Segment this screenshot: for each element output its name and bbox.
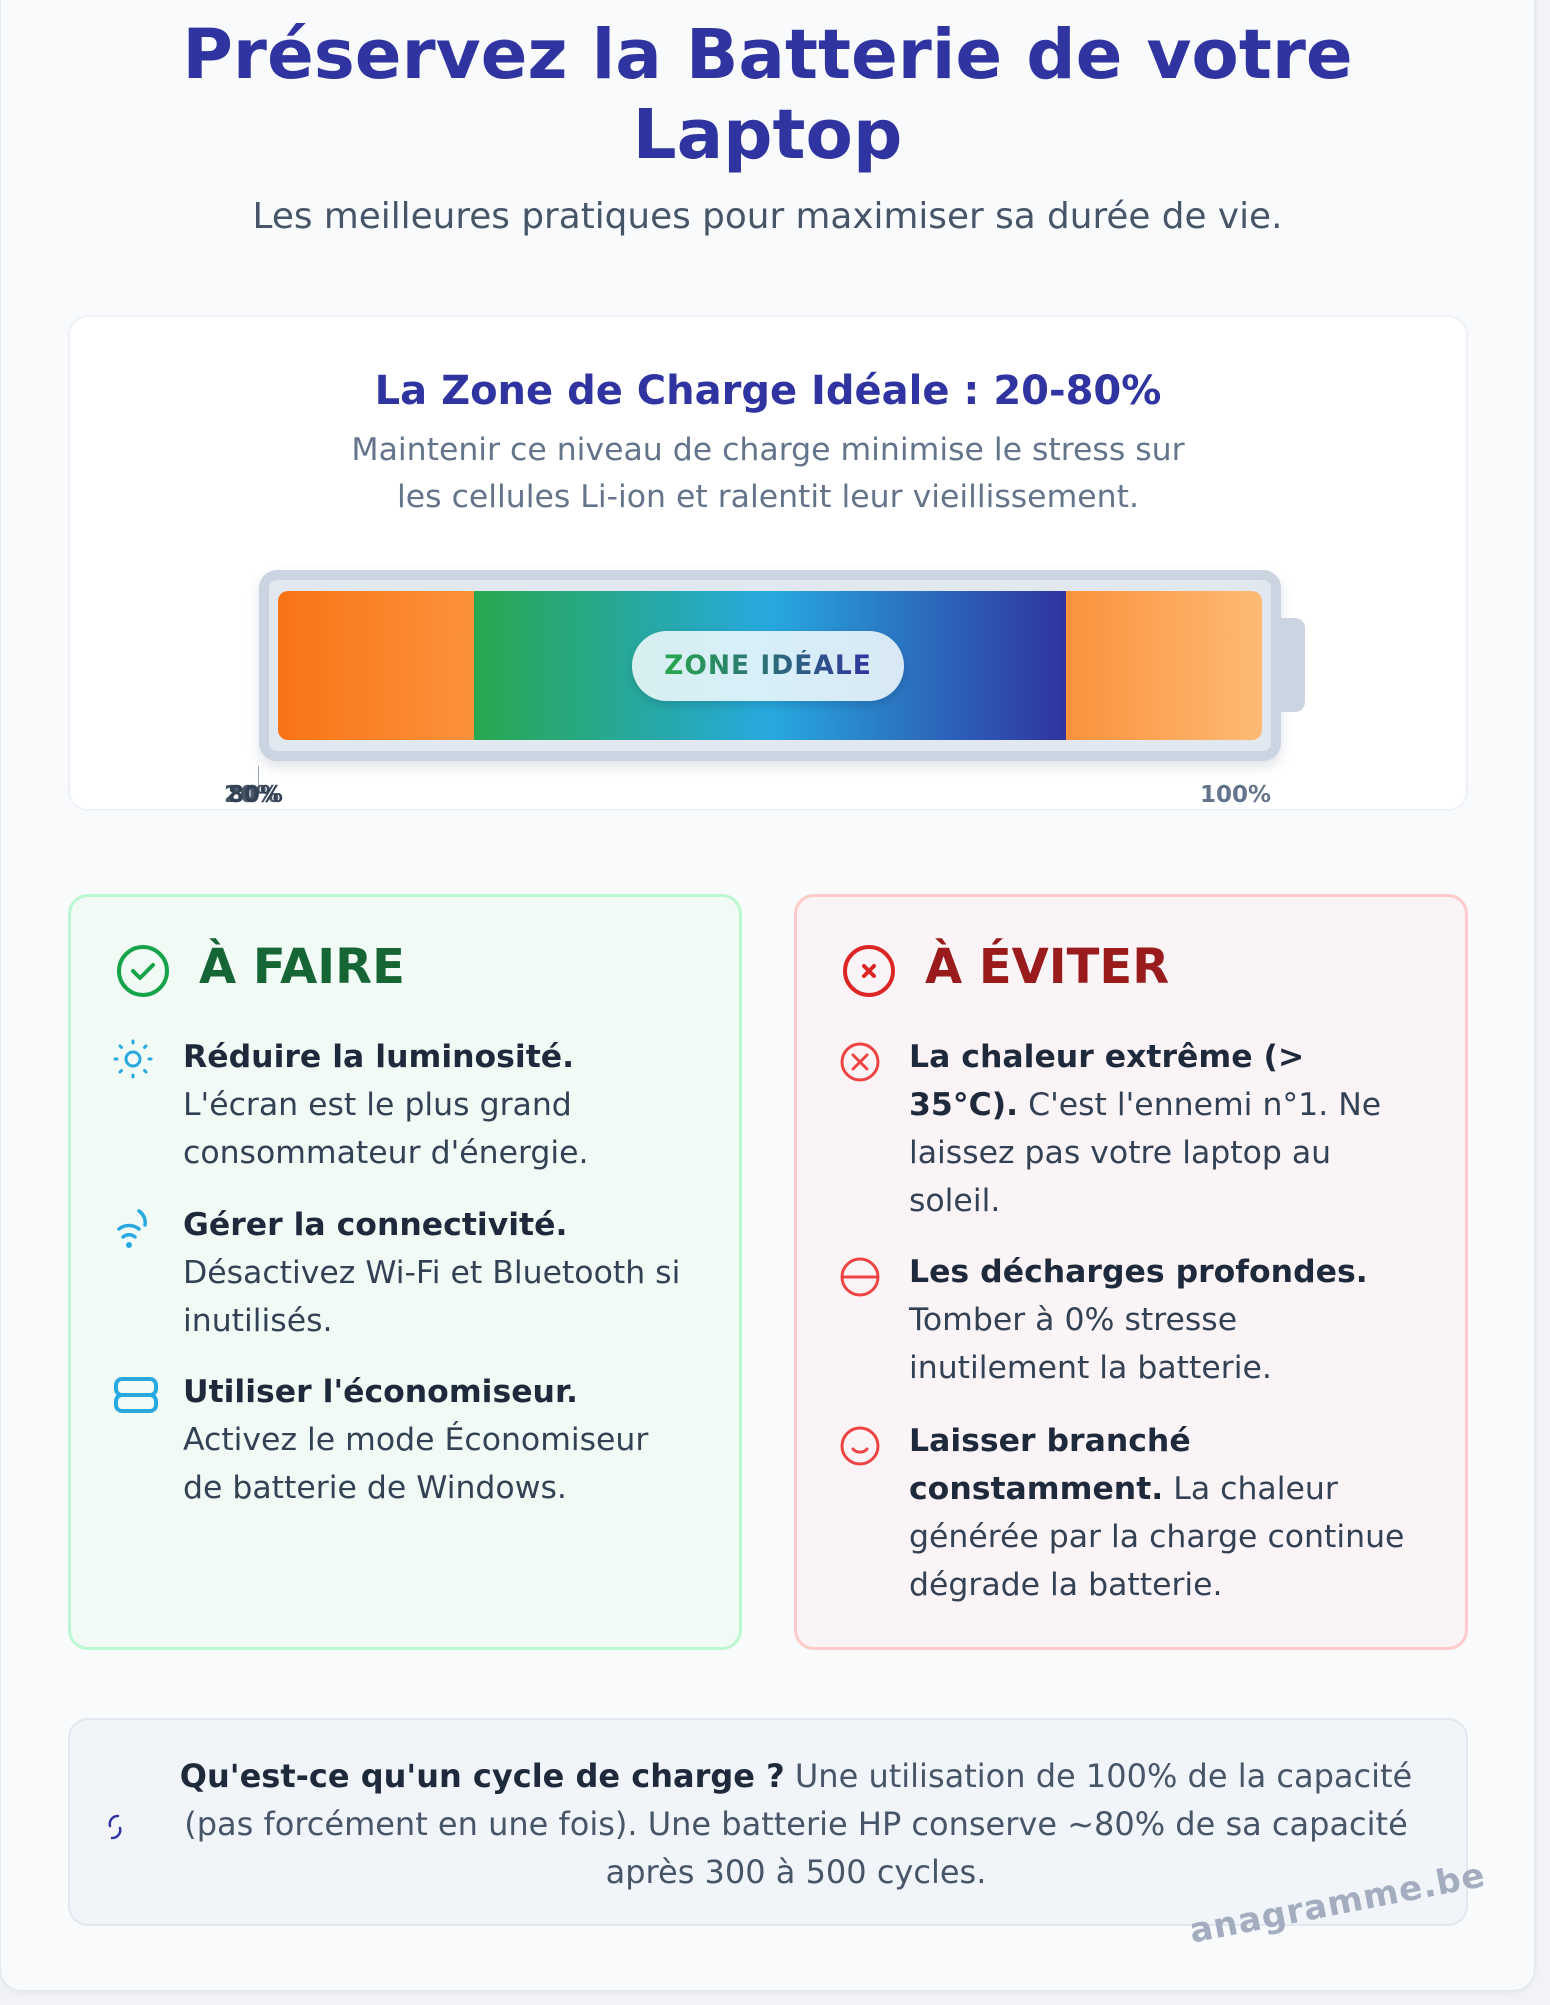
item: saver: Activez le mode Économiseur de batterie de Windows.	[183, 1422, 648, 1506]
panel: ideal charge zone	[68, 315, 1468, 811]
icon: x circle	[843, 945, 895, 997]
panel: do	[68, 894, 742, 1650]
pill label	[632, 631, 904, 701]
item: deep discharge: Tomber à 0% stresse inutilement la batterie.	[909, 1302, 1272, 1386]
item: brightness: Réduire la luminosité.	[183, 1039, 574, 1075]
zone description: les cellules Li-ion et ralentit leur vieillissement.	[397, 479, 1139, 515]
zone description	[351, 432, 1185, 515]
scale labels: 100%	[1200, 782, 1271, 808]
avoid heading: À ÉVITER	[925, 939, 1169, 995]
item: brightness: L'écran est le plus grand consommateur d'énergie.	[183, 1087, 588, 1171]
zone description: Maintenir ce niveau de charge minimise le stress sur	[351, 432, 1185, 468]
scale labels: 80%	[228, 782, 283, 808]
item: saver: Utiliser l'économiseur.	[183, 1374, 578, 1410]
title	[182, 15, 1353, 175]
info text: Qu'est-ce qu'un cycle de charge ? Une utilisation de 100% de la capacité (pas forcément en une fois). Une batterie HP conserve ~80% de sa capacité après 300 à 500 cycles.	[180, 1757, 1412, 1891]
title: Laptop	[633, 95, 902, 175]
subtitle: Les meilleures pratiques pour maximiser sa durée de vie.	[253, 196, 1282, 237]
icon: sun	[114, 1040, 152, 1078]
icon: plug circle	[840, 1426, 880, 1466]
panel: avoid	[794, 894, 1468, 1650]
icon: check circle	[117, 945, 169, 997]
info box: charge cycle	[68, 1718, 1468, 1926]
item: brightness	[114, 1039, 588, 1171]
watermark: anagramme.be	[1186, 1855, 1489, 1952]
item: connectivity	[117, 1207, 680, 1339]
item: connectivity: Désactivez Wi-Fi et Bluetooth si inutilisés.	[183, 1255, 680, 1339]
title: Préservez la Batterie de votre	[182, 15, 1353, 95]
icon: minus circle	[840, 1258, 880, 1296]
icon: wifi	[117, 1209, 147, 1248]
do heading	[117, 938, 405, 997]
icon: battery saver	[114, 1377, 158, 1413]
do heading: À FAIRE	[199, 939, 405, 995]
item: saver	[114, 1374, 648, 1506]
item: connectivity: Gérer la connectivité.	[183, 1207, 567, 1243]
battery graphic	[256, 570, 1305, 770]
icon: cycle	[108, 1814, 122, 1840]
pill label: ZONE IDÉALE	[664, 650, 872, 681]
item: heat: La chaleur extrême (> 35°C). C'est l'ennemi n°1. Ne laissez pas votre laptop au soleil.	[909, 1039, 1381, 1219]
item: deep discharge: Les décharges profondes.	[909, 1254, 1368, 1290]
item: deep discharge	[840, 1254, 1368, 1386]
scale labels	[224, 766, 1271, 808]
scale labels: 20%	[224, 782, 279, 808]
item: always plugged: Laisser branché constamment. La chaleur générée par la charge continue dégrade la batterie.	[909, 1423, 1404, 1603]
zone heading: La Zone de Charge Idéale : 20-80%	[375, 368, 1161, 414]
icon: x circle small	[840, 1042, 880, 1082]
